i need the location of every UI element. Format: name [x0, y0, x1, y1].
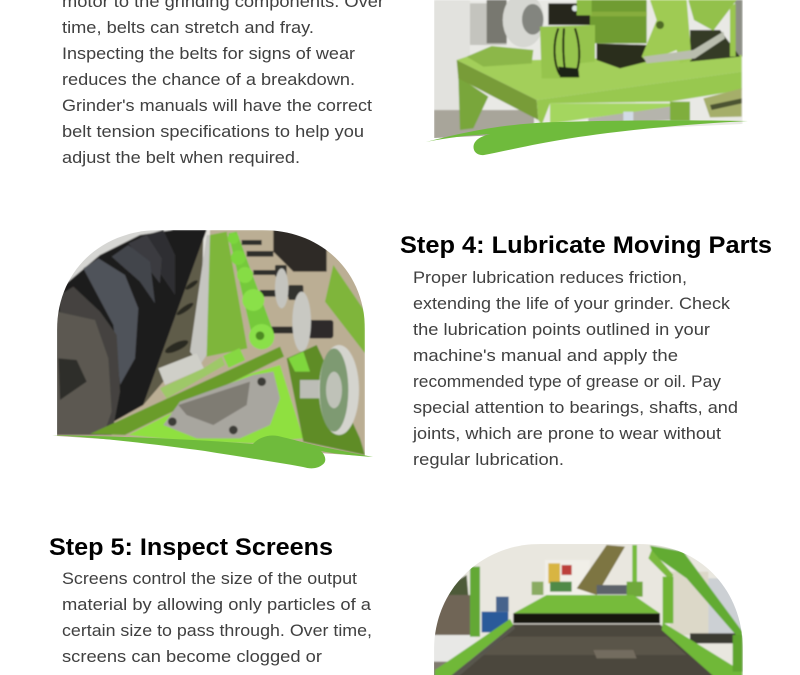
photo: grinder motor on green table [434, 0, 742, 140]
text block: step 3 belts: time, belts can stretch and fray. [62, 19, 314, 37]
text block: step 4 lubrication: regular lubrication. [413, 451, 564, 469]
text block: step 3 belts: belt tension specifications to help you [62, 123, 364, 141]
photo: lubrication points on rollers and handwheel [57, 230, 365, 460]
text block: step 4 lubrication [412, 269, 738, 469]
text block: step 5 screens [62, 570, 372, 675]
text block: step 5 screens: material by allowing only particles of a [62, 596, 372, 614]
text block: step 4 lubrication: Proper lubrication reduces friction, [413, 269, 687, 287]
text block: step 3 belts [62, 0, 385, 167]
text block: step 3 belts: Grinder's manuals will have the correct [62, 97, 372, 115]
text block: step 3 belts: Inspecting the belts for signs of wear [62, 45, 356, 63]
text block: step 3 belts: adjust the belt when required. [62, 149, 300, 167]
text block: step 5 screens: certain size to pass through. Over time, [62, 622, 372, 640]
text block: step 4 lubrication: extending the life of your grinder. Check [413, 295, 731, 313]
text block: step 4 lubrication: the lubrication points outlined in your [413, 321, 711, 339]
text block: step 4 lubrication: machine's manual and apply the [413, 347, 678, 365]
text block: step 4 lubrication: special attention to bearings, shafts, and [413, 399, 738, 417]
photo: vibrating screen deck [433, 543, 743, 675]
swoosh: green brush under motor photo [426, 120, 748, 155]
swoosh: green brush under roller photo [52, 435, 373, 468]
text block: step 4 lubrication: joints, which are prone to wear without [412, 425, 721, 443]
text block: step 4 lubrication: recommended type of grease or oil. Pay [413, 373, 722, 391]
heading: step 4: Step 4: Lubricate Moving Parts [400, 232, 772, 259]
heading: step 5: Step 5: Inspect Screens [49, 534, 333, 561]
text block: step 5 screens: Screens control the size of the output [62, 570, 357, 588]
text block: step 3 belts: reduces the chance of a breakdown. [62, 71, 355, 89]
text block: step 5 screens: screens can become clogged or [62, 648, 323, 666]
